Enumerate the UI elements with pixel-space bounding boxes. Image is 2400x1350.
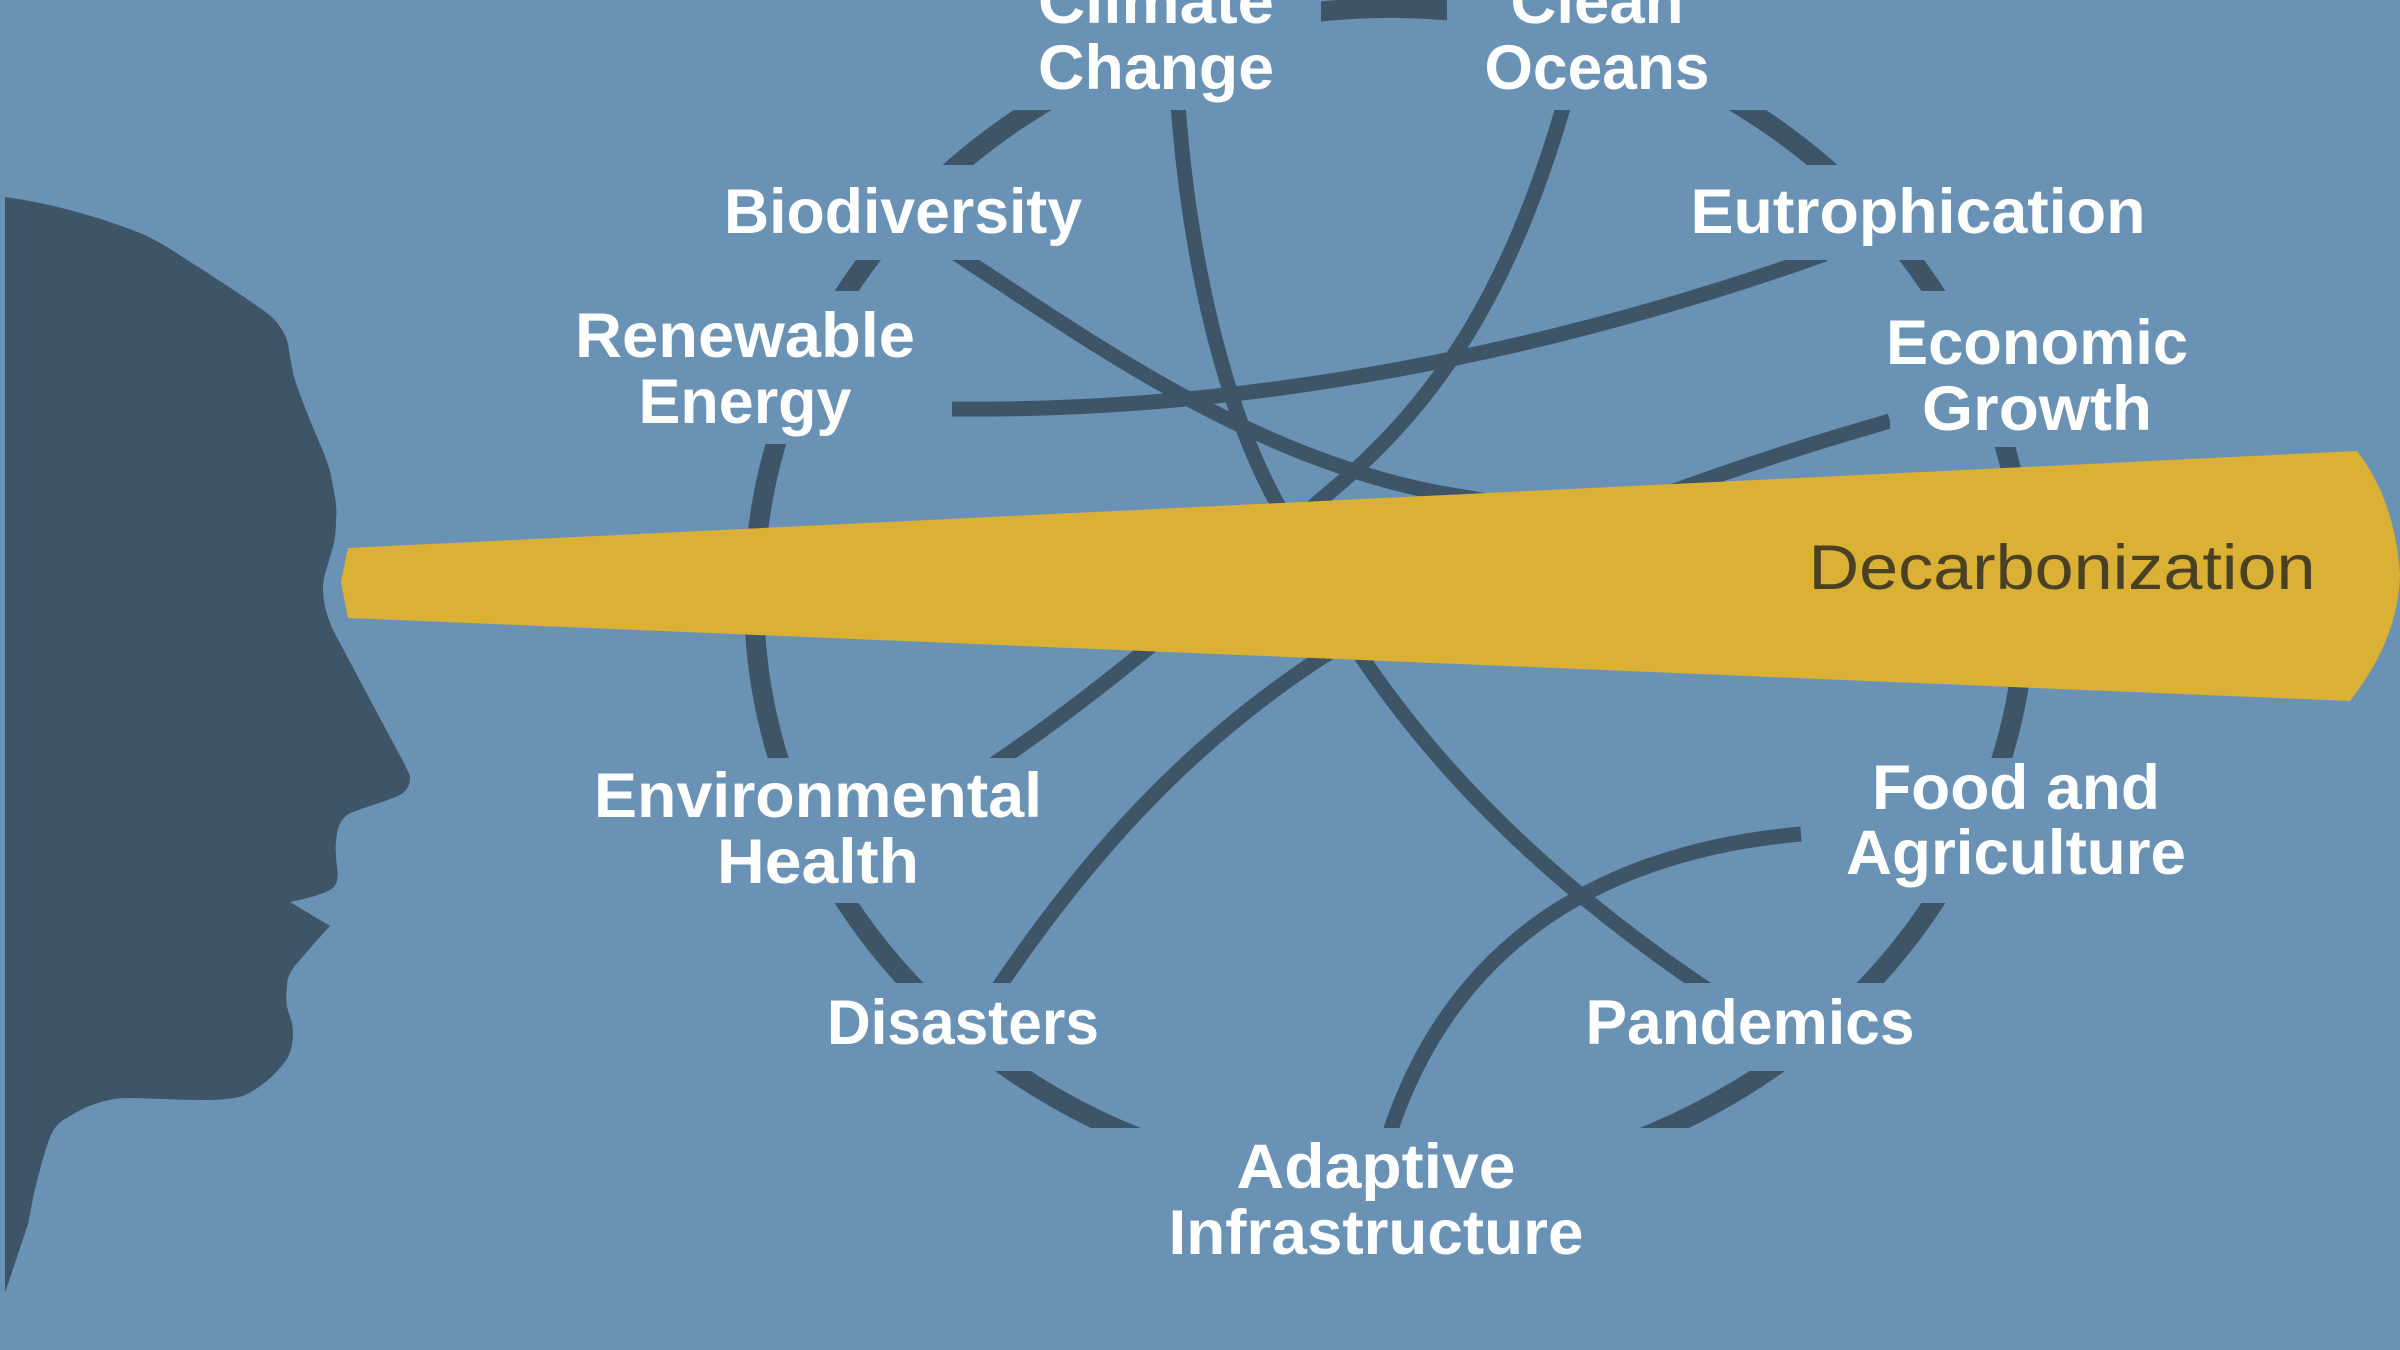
label: Biodiversity: Biodiversity [724, 177, 1082, 247]
connecting chords between topics [935, 90, 1890, 1148]
label: Economic Growth: Economic [1886, 308, 2188, 378]
diagram: ring of topics connected by chords [550, 0, 2224, 1298]
ring and chord gaps behind labels [550, 0, 2224, 1298]
label: Food and Agriculture: Food and [1872, 753, 2160, 823]
label: Renewable Energy [575, 301, 915, 437]
label: Environmental Health [594, 761, 1042, 897]
outer ring [754, 8, 2026, 1186]
label: Food and Agriculture: Agriculture [1846, 818, 2186, 888]
label: Clean Oceans: Oceans [1484, 33, 1710, 103]
label: Environmental Health: Environmental [594, 761, 1042, 831]
icon: head silhouette in profile [5, 197, 410, 1293]
label: Climate Change [1038, 0, 1274, 103]
label: Adaptive Infrastructure: Infrastructure [1168, 1198, 1584, 1268]
beam label: Decarbonization: Decarbonization [1808, 533, 2316, 603]
label: Renewable Energy: Renewable [575, 301, 915, 371]
yellow vision beam from the eye [341, 451, 2400, 701]
label: Adaptive Infrastructure: Adaptive [1236, 1132, 1516, 1202]
label: Adaptive Infrastructure [1168, 1132, 1584, 1268]
label: Food and Agriculture [1846, 753, 2186, 888]
label: Economic Growth [1886, 308, 2188, 444]
label: Climate Change: Change [1038, 33, 1274, 103]
label: Eutrophication: Eutrophication [1690, 177, 2146, 247]
label: Renewable Energy: Energy [638, 367, 852, 437]
label: Disasters: Disasters [827, 988, 1099, 1058]
label: Clean Oceans [1484, 0, 1710, 103]
label: Economic Growth: Growth [1922, 374, 2152, 444]
label: Pandemics: Pandemics [1586, 988, 1914, 1058]
label: Environmental Health: Health [717, 827, 919, 897]
